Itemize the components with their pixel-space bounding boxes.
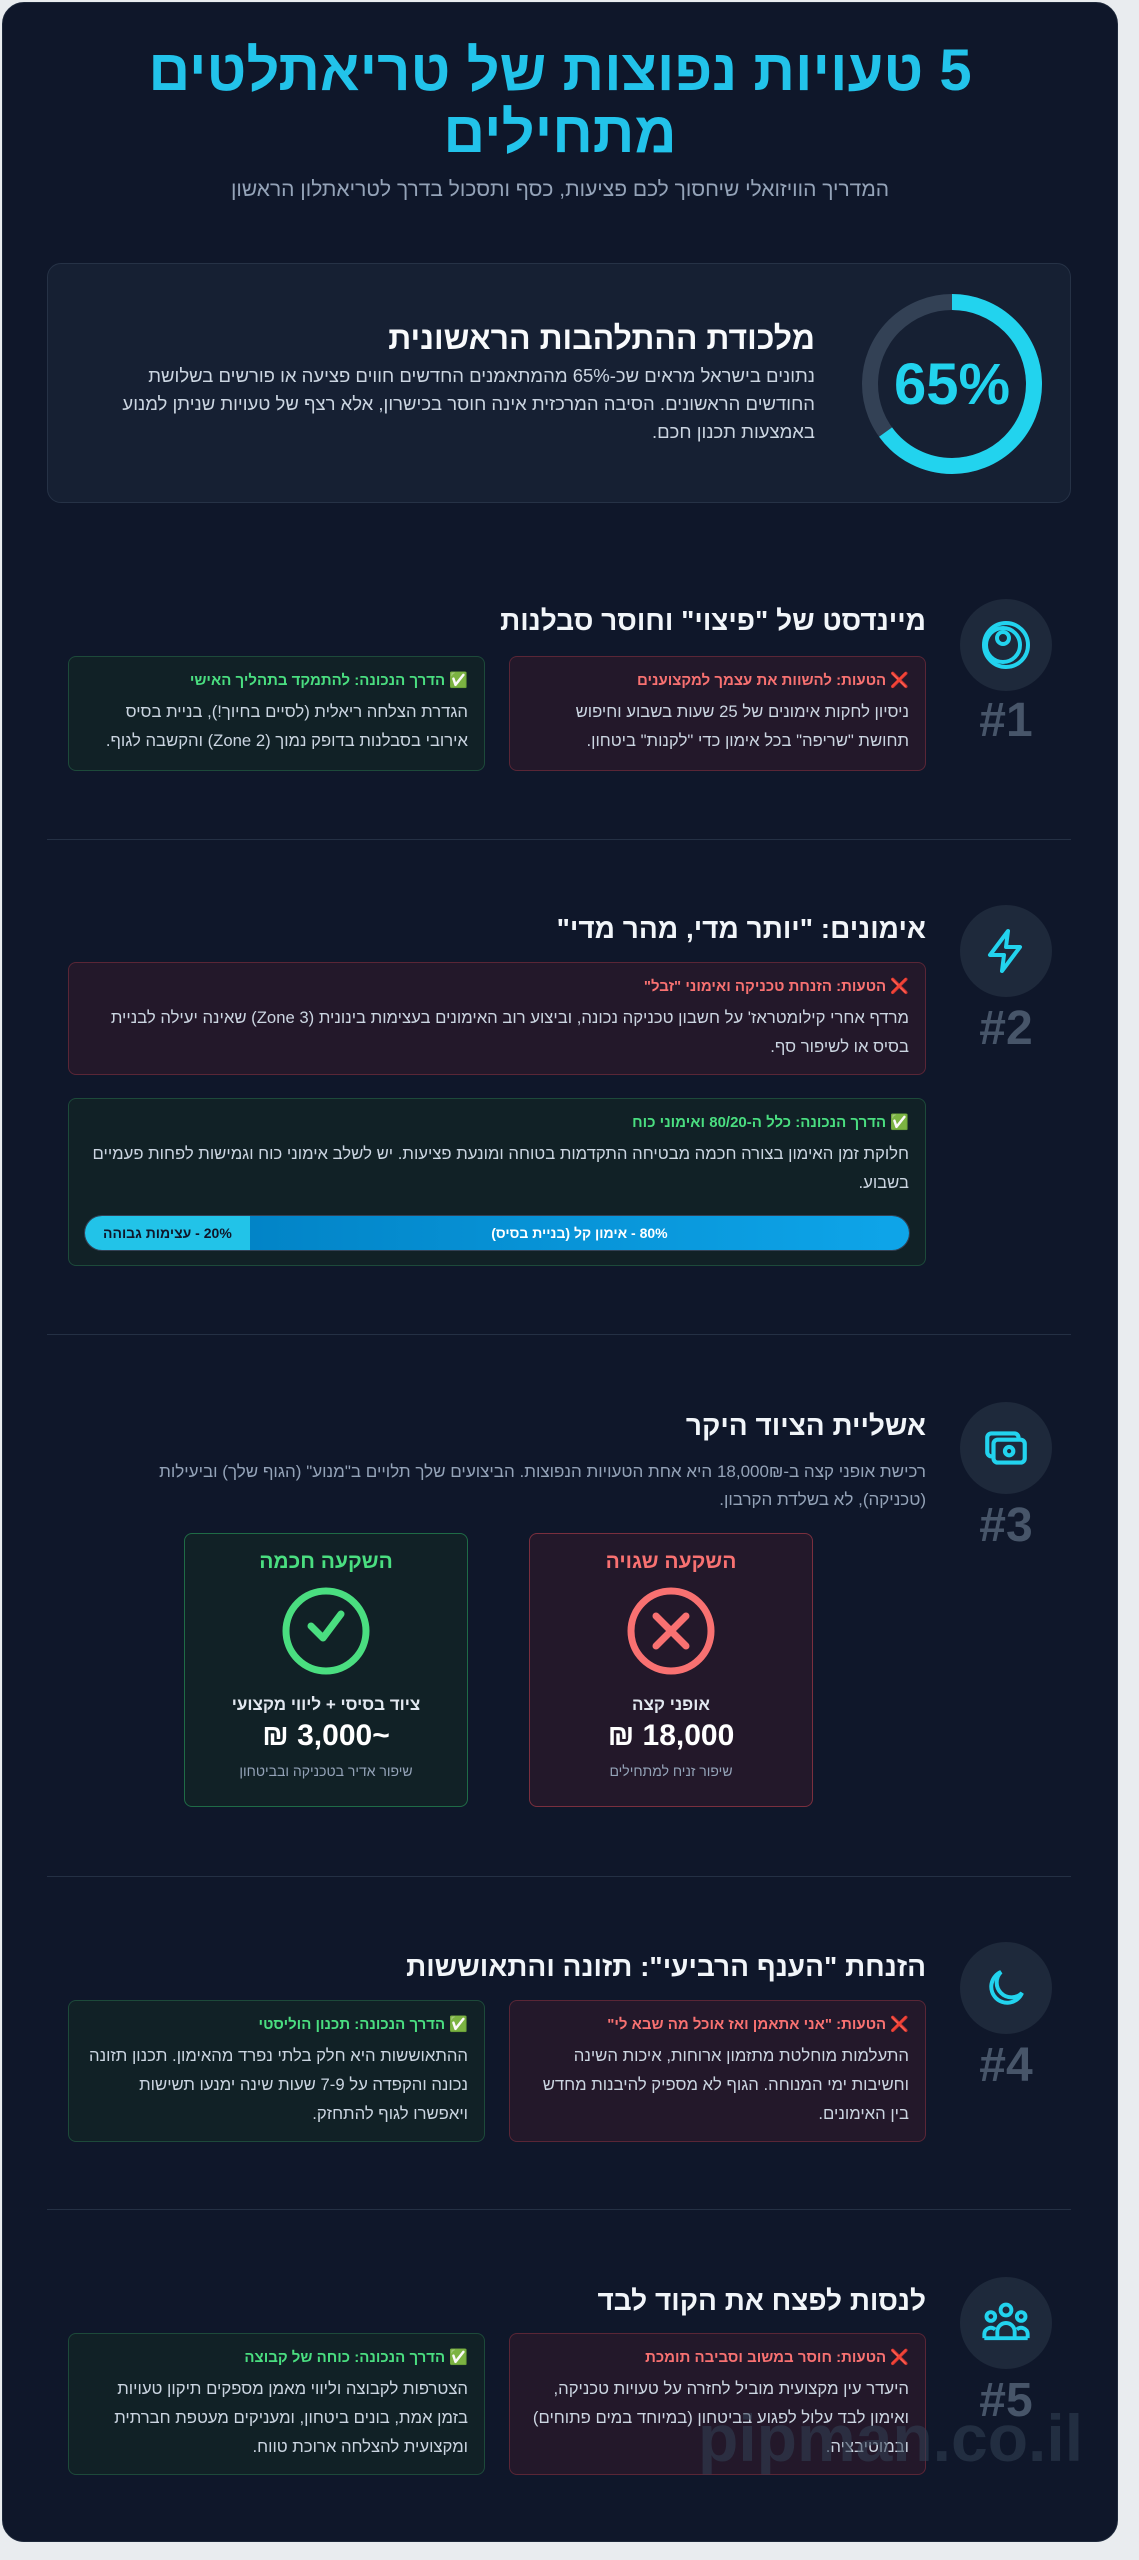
correct box 4: ההתאוששות היא חלק בלתי נפרד מהאימון. תכנון תזונה נכונה והקפדה על 7-9 שעות שינה ימנעו תשישות ויאפשרו לגוף להתחזק. (89, 2046, 468, 2123)
card: wrong investment: אופני קצה (632, 1695, 710, 1714)
mistake box 2: מרדף אחרי קילומטראז' על חשבון טכניקה נכונה, וביצוע רוב האימונים בעצימות בינונית (Zone 3) שאינה יעילה לבניית בסיס או לשיפור סף. (111, 1008, 909, 1056)
card: smart investment: שיפור אדיר בטכניקה ובביטחון (239, 1763, 413, 1779)
correct box 2 with bar: ✅ הדרך הנכונה: כלל ה-80/20 ואימוני כוח (632, 1114, 909, 1131)
icon: group (960, 2277, 1052, 2369)
heading 2: אימונים: "יותר מדי, מהר מדי" (557, 913, 926, 944)
icon: money (960, 1402, 1052, 1494)
section 3 (159, 1402, 1052, 1807)
number 3: #3 (979, 1499, 1033, 1552)
card: smart investment: ~3,000 ₪ (262, 1719, 390, 1752)
heading 5: לנסות לפצח את הקוד לבד (598, 2285, 926, 2316)
number 1: #1 (979, 694, 1033, 747)
card: wrong investment: 18,000 ₪ (608, 1719, 734, 1752)
mistake box 1 (509, 656, 926, 771)
number 5: #5 (979, 2374, 1033, 2427)
mistake box 2: ❌ הטעות: הזנחת טכניקה ואימוני "זבל" (644, 978, 909, 995)
number 4: #4 (979, 2039, 1033, 2092)
card: smart investment: השקעה חכמה (259, 1550, 393, 1573)
mistake box 4: התעלמות מוחלטת מתזמון ארוחות, איכות השינה וחשיבות ימי המנוחה. הגוף לא מספיק להיבנות מחדש בין האימונים. (543, 2046, 909, 2123)
bar chart 80/20: 20% - עצימות גבוהה (103, 1225, 232, 1241)
correct box 2 with bar (68, 1098, 926, 1266)
subtitle: המדריך הוויזואלי שיחסוך לכם פציעות, כסף ותסכול בדרך לטריאתלון הראשון (231, 178, 889, 201)
correct box 4 (68, 2000, 485, 2142)
heading 4: הזנחת "הענף הרביעי": תזונה והתאוששות (406, 1951, 926, 1982)
correct box 1 (68, 656, 485, 771)
section 2 (68, 905, 1052, 1266)
bar chart 80/20 (84, 1215, 910, 1251)
donut chart 65%: 65% (894, 352, 1010, 417)
section 4 (68, 1942, 1052, 2142)
icon: lightning (960, 905, 1052, 997)
mistake box 4: ❌ הטעות: "אני אתאמן ואז אוכל מה שבא לי" (607, 2016, 909, 2033)
correct box 5: הצטרפות לקבוצה וליווי מאמן מספקים תיקון טעויות בזמן אמת, בונים ביטחון, ומעניקים מעטפת חברתית ומקצועית להצלחה ארוכת טווח. (114, 2379, 468, 2456)
icon: target (960, 599, 1052, 691)
correct box 2 with bar: חלוקת זמן האימון בצורה חכמה מבטיחה התקדמות בטוחה ומונעת פציעות. יש לשלב אימוני כוח וגמישות לפחות פעמיים בשבוע. (92, 1144, 909, 1192)
card: wrong investment: שיפור זניח למתחילים (609, 1763, 733, 1779)
correct box 4: ✅ הדרך הנכונה: תכנון הוליסטי (259, 2016, 468, 2033)
mistake box 2 (68, 962, 926, 1075)
bar chart 80/20: 80% - אימון קל (בניית בסיס) (491, 1225, 668, 1241)
mistake box 5 (509, 2333, 926, 2475)
correct box 1: ✅ הדרך הנכונה: להתמקד בתהליך האישי (190, 672, 468, 689)
icon: check circle (282, 1588, 370, 1674)
card: smart investment (184, 1533, 468, 1807)
stat text: נתונים בישראל מראים שכ-65% מהמתאמנים החדשים חווים פציעה או פורשים בשלושת החודשים הראשונים. הסיבה המרכזית אינה חוסר בכישרון, אלא רצף של טעויות שניתן למנוע באמצעות תכנון חכם. (122, 365, 815, 442)
heading 1: מיינדסט של "פיצוי" וחוסר סבלנות (500, 605, 926, 636)
mistake box 4 (509, 2000, 926, 2142)
heading 3: אשליית הציוד היקר (686, 1410, 926, 1441)
icon: x circle (628, 1588, 714, 1674)
stat heading: מלכודת ההתלהבות הראשונית (388, 320, 815, 356)
card: wrong investment (529, 1533, 813, 1807)
donut chart 65% (862, 294, 1042, 474)
mistake box 5: היעדר עין מקצועית מוביל לחזרה על טעויות טכניקה, ואימון לבד עלול לפגוע בביטחון (במיוחד במים פתוחים) ובמוטיבציה. (533, 2379, 909, 2456)
mistake box 1: ניסיון לחקות אימונים של 25 שעות בשבוע וחיפוש תחושת "שריפה" בכל אימון כדי "לקנות" ביטחון. (576, 702, 909, 750)
icon: moon (960, 1942, 1052, 2034)
card: wrong investment: השקעה שגויה (606, 1550, 736, 1573)
correct box 1: הגדרת הצלחה ריאלית (לסיים בחיוך!), בניית בסיס אירובי בסבלנות בדופק נמוך (Zone 2) והקשבה לגוף. (106, 702, 468, 750)
mistake box 1: ❌ הטעות: להשוות את עצמך למקצוענים (637, 672, 909, 689)
intro text 3: רכישת אופני קצה ב-18,000₪ היא אחת הטעויות הנפוצות. הביצועים שלך תלויים ב"מנוע" (הגוף שלך) וביעילות (טכניקה), לא בשלדת הקרבון. (159, 1462, 926, 1509)
correct box 5 (68, 2333, 485, 2475)
mistake box 5: ❌ הטעות: חוסר במשוב וסביבה תומכת (645, 2349, 909, 2366)
card: smart investment: ציוד בסיסי + ליווי מקצועי (232, 1695, 420, 1714)
correct box 5: ✅ הדרך הנכונה: כוחה של קבוצה (244, 2349, 468, 2366)
section 1 (68, 599, 1052, 771)
number 2: #2 (979, 1002, 1033, 1055)
section 5 (68, 2277, 1052, 2475)
panel: stat (47, 263, 1071, 503)
title: 5 טעויות נפוצות של טריאתלטים מתחילים (148, 38, 972, 165)
watermark: pipman.co.il (698, 2401, 1083, 2475)
